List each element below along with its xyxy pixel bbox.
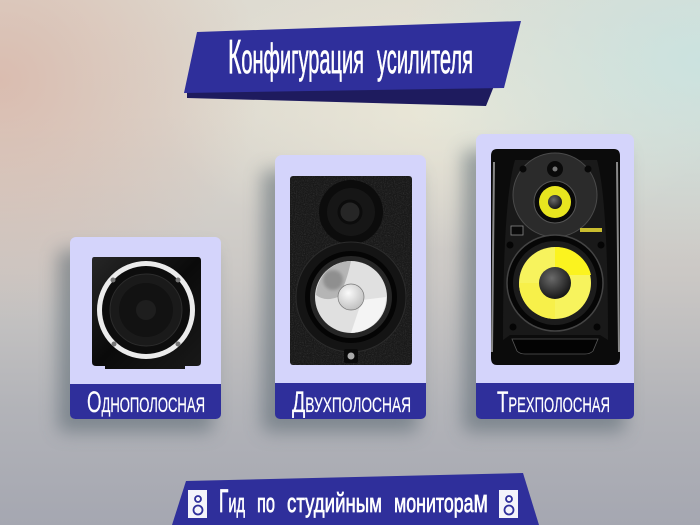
card bbox=[476, 134, 634, 419]
title banner bbox=[184, 21, 521, 106]
panel: three-way speaker bbox=[463, 134, 634, 432]
title text: Конфигурация bbox=[228, 31, 364, 84]
card bbox=[70, 237, 221, 419]
speaker photo: tweeter and white woofer bbox=[290, 176, 412, 365]
label band bbox=[70, 384, 221, 419]
speaker photo: single driver bbox=[92, 257, 201, 369]
icon: left speaker bbox=[188, 490, 207, 518]
banner body bbox=[184, 21, 521, 93]
footer text: Гид bbox=[219, 483, 245, 519]
footer text: мониторам bbox=[394, 483, 488, 519]
banner shadow bbox=[187, 86, 494, 106]
footer text: по bbox=[257, 488, 275, 518]
footer banner bbox=[172, 473, 539, 525]
icon: right speaker bbox=[499, 490, 518, 518]
speaker photo: yellow three-driver monitor bbox=[491, 149, 620, 365]
card shadow bbox=[262, 170, 418, 432]
card shadow bbox=[58, 250, 213, 432]
card shadow bbox=[463, 150, 625, 432]
label: ТРЕХПОЛОСНАЯ bbox=[497, 386, 610, 419]
label band bbox=[476, 383, 634, 419]
panel: two-way speaker bbox=[262, 155, 426, 432]
footer banner body bbox=[172, 473, 539, 525]
label: ДВУХПОЛОСНАЯ bbox=[292, 386, 411, 419]
footer text bbox=[219, 483, 488, 519]
card bbox=[275, 155, 426, 419]
label band bbox=[275, 383, 426, 419]
label: ОДНОПОЛОСНАЯ bbox=[87, 386, 205, 419]
title banner: усилителя bbox=[377, 35, 473, 82]
footer text: студийным bbox=[287, 488, 382, 518]
panel: single-way speaker bbox=[58, 237, 221, 432]
